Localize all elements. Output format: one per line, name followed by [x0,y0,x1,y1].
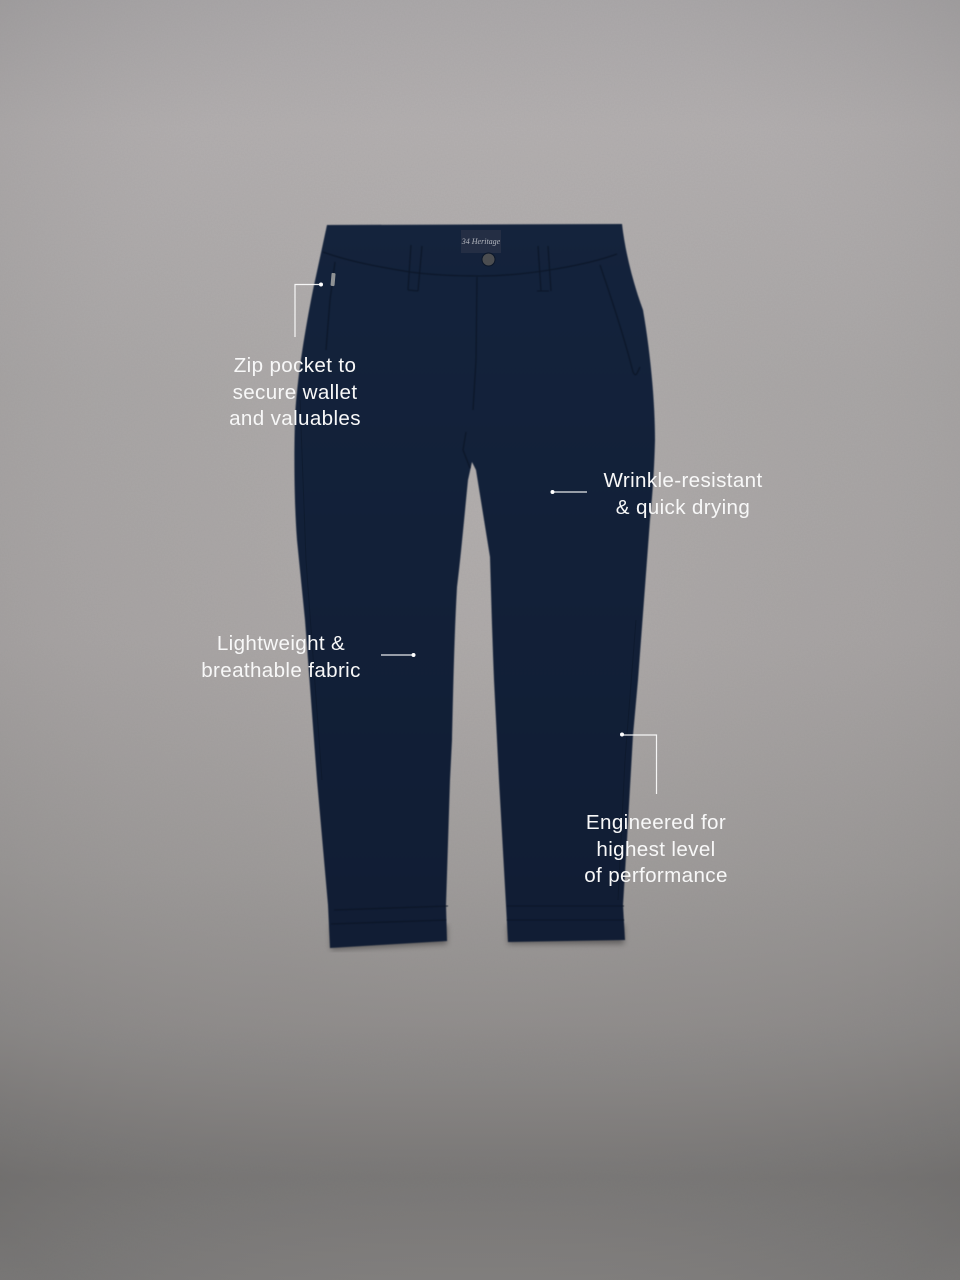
text: zip pocket: and valuables [229,407,361,430]
text: engineered [584,811,728,887]
text: engineered: highest level [596,838,716,860]
text: zip pocket: Zip pocket to [234,354,356,377]
text: wrinkle resistant: & quick drying [616,496,750,518]
button [482,253,495,266]
text: lightweight: Lightweight & [217,632,345,655]
text: lightweight [201,632,361,682]
trousers [294,224,655,948]
text: wrinkle resistant: Wrinkle-resistant [603,469,763,492]
brand label: 34 Heritage [461,237,501,246]
text: wrinkle resistant [603,469,763,518]
trousers body [294,224,655,948]
text: engineered: Engineered for [586,811,726,834]
side seams [300,400,636,900]
trousers shadow [331,925,624,950]
waistband seams [323,245,640,924]
text: lightweight: breathable fabric [201,658,361,682]
text: zip pocket: secure wallet [233,380,357,404]
zipper pull [330,273,336,286]
brand label [461,230,501,253]
text: zip pocket [229,354,361,430]
text: engineered: of performance [584,864,728,887]
